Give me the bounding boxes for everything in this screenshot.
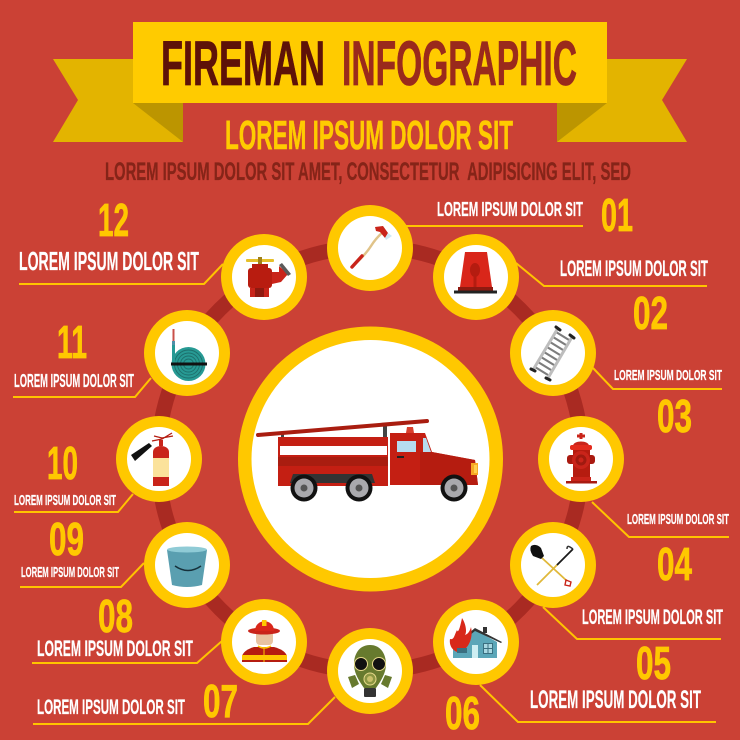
label 08: LOREM IPSUM DOLOR SIT [37,636,193,661]
leader 02 [516,263,707,286]
icon: bucket [144,522,230,608]
item 08: firefighter [32,590,307,685]
icon: gas mask [327,628,413,714]
item 07: gas mask [33,628,413,727]
item 12: hydrant valve [19,194,307,320]
title: FIREMAN [161,29,325,99]
item 03: ladder [510,310,722,442]
number 04: 04 [657,538,692,590]
label 01: LOREM IPSUM DOLOR SIT [437,199,583,221]
icon: axe [327,205,413,291]
icon: house on fire [433,599,519,685]
leader 10 [14,494,133,512]
leader 08 [32,641,222,663]
icon: alarm light [433,234,519,320]
item 11: fire hose [13,310,230,397]
leader 07 [33,697,335,724]
number 10: 10 [47,437,78,489]
leader 03 [593,368,722,389]
item 09: bucket [20,513,230,608]
label 12: LOREM IPSUM DOLOR SIT [19,246,199,276]
number 07: 07 [203,675,238,727]
icon: hydrant valve [221,234,307,320]
number 02: 02 [633,287,668,339]
number 01: 01 [601,189,633,241]
icon: fire truck [258,421,478,502]
leader 04 [592,502,729,537]
leader 09 [20,563,144,587]
title [161,29,577,99]
label 11: LOREM IPSUM DOLOR SIT [14,371,134,391]
item 06: house on fire [433,599,716,739]
icon: hydrant [538,416,624,502]
leader 11 [13,378,151,397]
label 07: LOREM IPSUM DOLOR SIT [37,696,185,719]
number 11: 11 [57,316,87,368]
leader 06 [480,685,716,722]
connecting ring [158,247,582,671]
label 09: LOREM IPSUM DOLOR SIT [21,564,119,581]
leader 05 [543,607,721,639]
number 05: 05 [636,637,671,689]
number 06: 06 [445,687,480,739]
ribbon banner [53,22,687,142]
number 03: 03 [657,390,692,442]
icon: fire hose [144,310,230,396]
central circle: fire truck [238,326,503,592]
icon: fire extinguisher [116,416,202,502]
icon: firefighter [221,599,307,685]
item 10: fire extinguisher [14,416,202,512]
leader 12 [19,264,223,284]
item 01: axe [327,189,633,291]
number 08: 08 [98,590,133,642]
number 09: 09 [49,513,84,565]
leader 01 [405,225,583,227]
item 04: hydrant [538,416,729,590]
icon: ladder [510,310,596,396]
item 05: shovel and hook [510,522,723,689]
number 12: 12 [98,194,129,246]
item 02: alarm light [433,234,708,339]
icon: shovel and hook [510,522,596,608]
subtitle: LOREM IPSUM DOLOR SIT [225,112,513,158]
label 10: LOREM IPSUM DOLOR SIT [14,492,116,509]
